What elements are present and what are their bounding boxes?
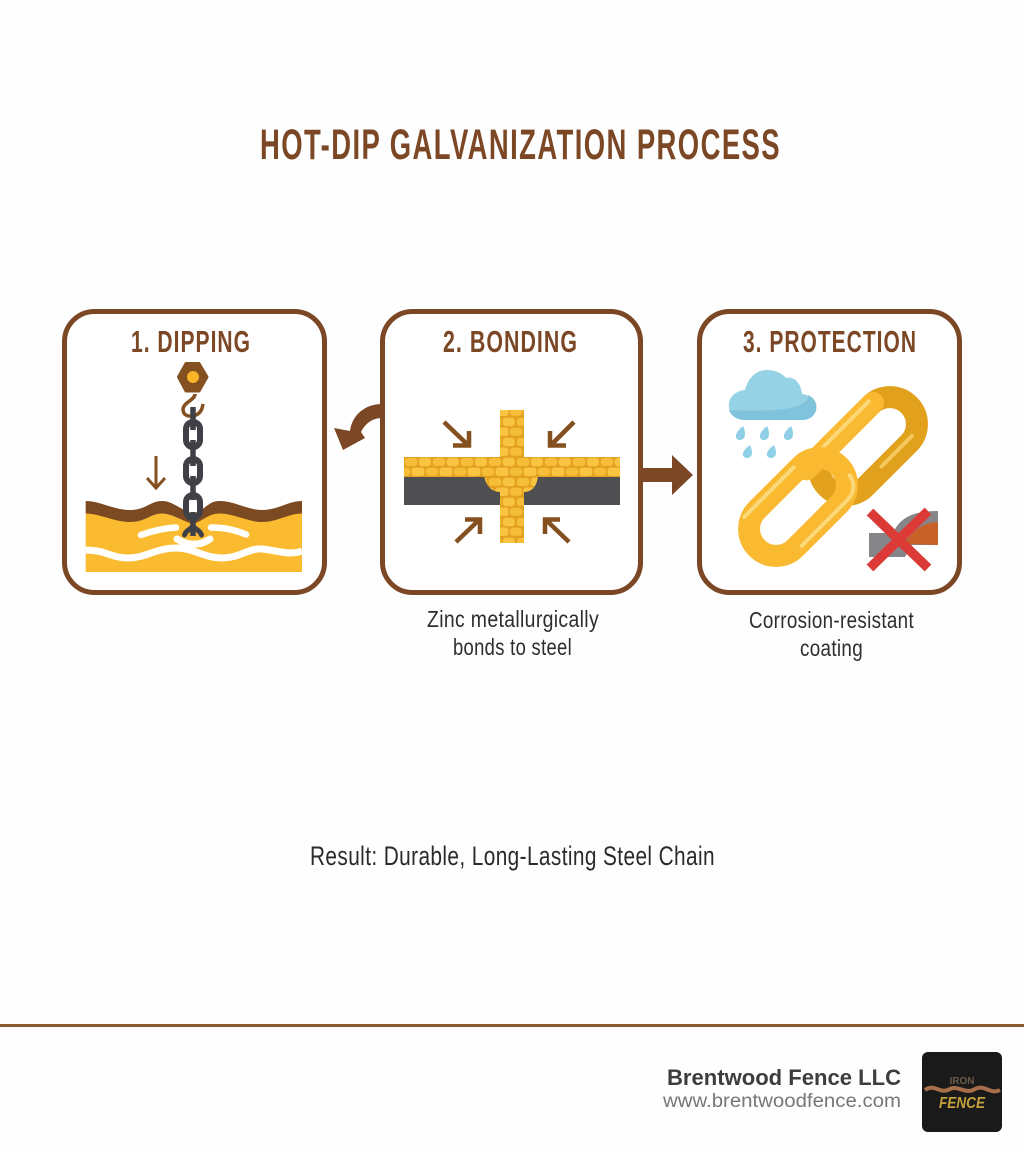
icon: rusted steel crossed out	[869, 511, 938, 568]
caption: protection: coating	[800, 635, 863, 661]
heading: dipping: 1. DIPPING	[131, 324, 251, 359]
logo	[922, 1052, 1002, 1132]
website: www.brentwoodfence.com	[662, 1090, 901, 1112]
arrow: forward to protection	[643, 455, 693, 495]
icon: hook and chain	[178, 364, 207, 536]
company name: Brentwood Fence LLC	[667, 1065, 901, 1090]
icon: molten zinc bath	[86, 501, 302, 572]
arrows: pressure	[444, 422, 574, 542]
caption: bonding: Zinc metallurgically	[427, 606, 599, 632]
arrow: down	[147, 456, 165, 488]
logo: FENCE	[939, 1095, 986, 1112]
caption: bonding: bonds to steel	[453, 634, 572, 660]
diagram: zinc bonded to steel	[404, 410, 620, 543]
logo: IRON	[950, 1076, 974, 1087]
footer brand	[662, 1052, 1002, 1132]
panel frame	[64, 312, 324, 592]
icon: galvanized chain links	[735, 383, 928, 569]
panel frame	[382, 312, 640, 592]
panel: bonding	[382, 312, 640, 592]
caption: protection	[749, 607, 914, 661]
panel: dipping	[64, 312, 324, 592]
icon: rain cloud	[729, 370, 816, 458]
heading: protection: 3. PROTECTION	[743, 324, 917, 359]
caption: bonding	[427, 606, 599, 660]
panel frame	[700, 312, 960, 592]
arrow: curved back to dipping	[334, 404, 382, 450]
panel: protection	[700, 312, 960, 592]
heading: bonding: 2. BONDING	[443, 324, 578, 359]
result statement: Result: Durable, Long-Lasting Steel Chain	[310, 841, 715, 871]
caption: protection: Corrosion-resistant	[749, 607, 914, 633]
